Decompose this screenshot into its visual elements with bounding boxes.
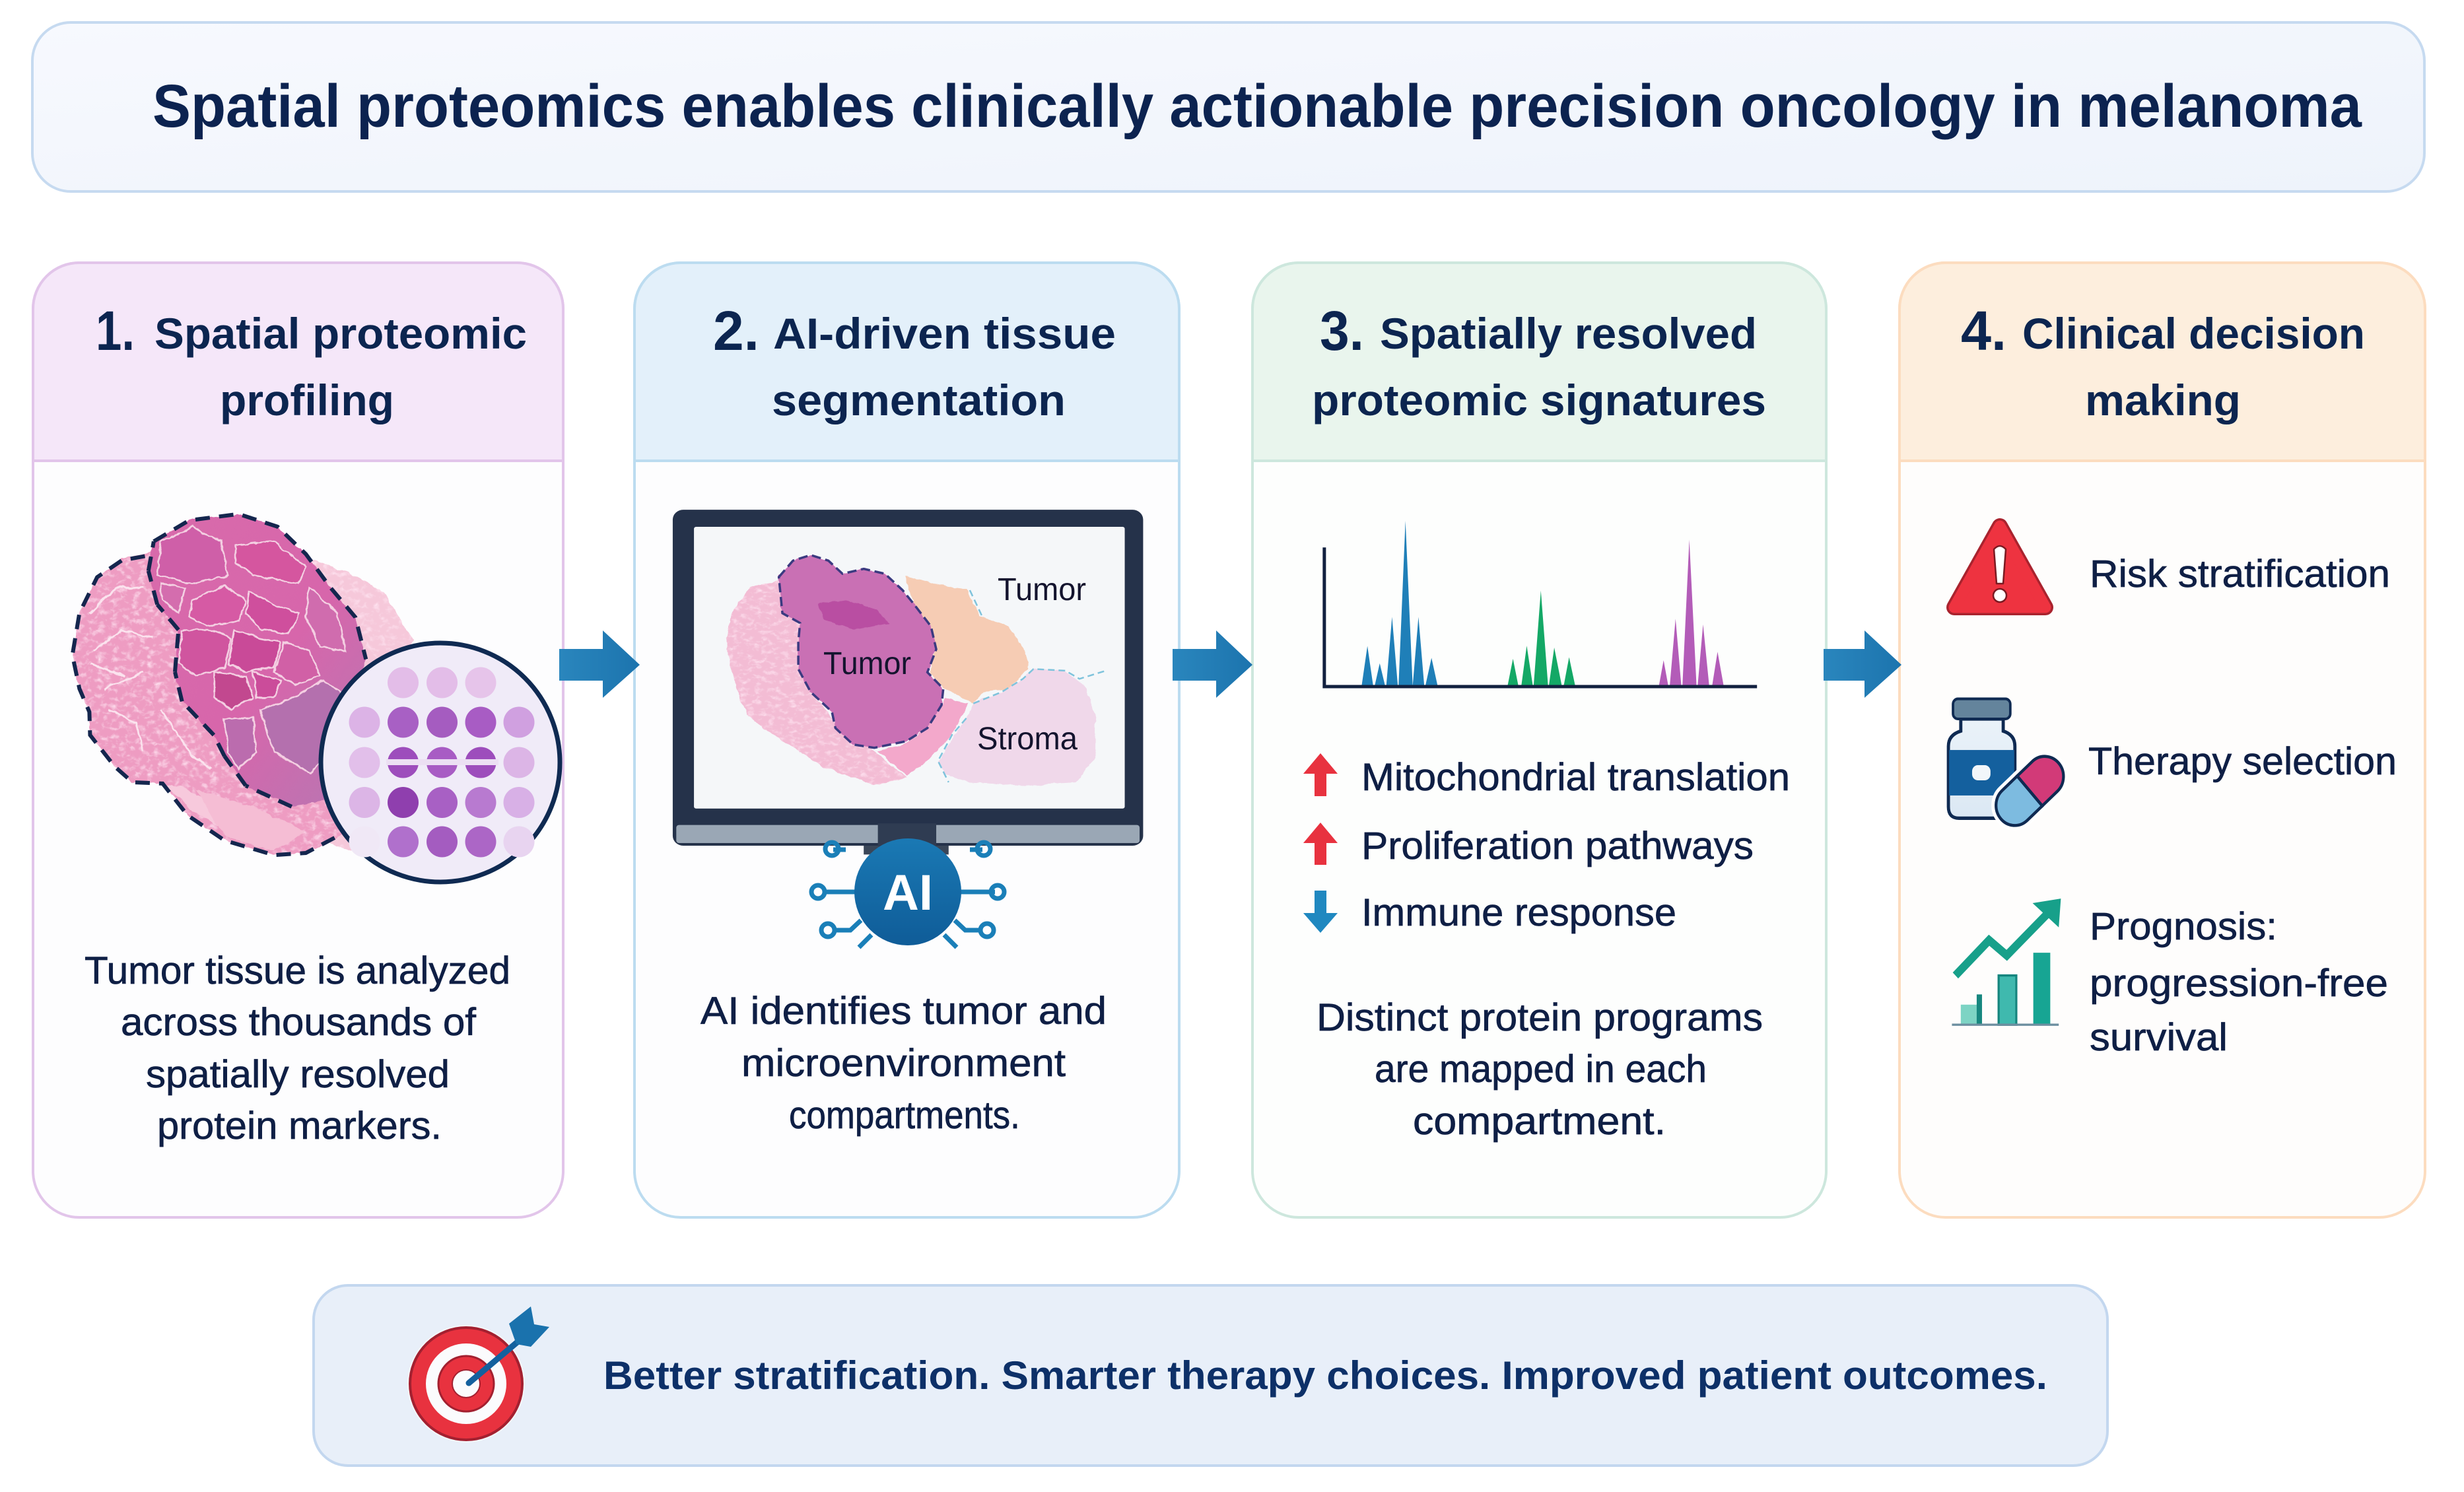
title banner <box>32 22 2424 191</box>
pathway change list: Mitochondrial translation <box>1361 756 1790 799</box>
panel 3 header <box>1252 263 1826 461</box>
panel 1 description: spatially resolved <box>146 1053 450 1096</box>
panel 2 description: AI identifies tumor and <box>701 990 1107 1033</box>
panel: 2. AI-driven tissue segmentation <box>634 263 1179 1217</box>
icon: red up arrow <box>1303 753 1338 796</box>
panel 1 description <box>85 949 510 1147</box>
segmentation labels <box>823 572 1086 757</box>
panel 3 header: proteomic signatures <box>1312 376 1766 424</box>
panel 2 header <box>634 263 1179 461</box>
panel 2 description <box>701 990 1107 1137</box>
panel 2 header: segmentation <box>772 376 1066 424</box>
panel 4 header: making <box>2085 376 2241 424</box>
panel 3 header: Spatially resolved <box>1380 309 1757 358</box>
panel 3 header: 3. <box>1320 300 1364 362</box>
chart: protein peak spectrum <box>1324 521 1757 687</box>
icon: warning triangle <box>1954 526 2045 607</box>
prognosis label: survival <box>2090 1016 2228 1059</box>
prognosis label <box>2090 905 2388 1059</box>
panel 2 header: AI-driven tissue <box>773 309 1116 358</box>
panel 4 header: 4. <box>1961 300 2006 362</box>
title: Spatial proteomics enables clinically actionable precision oncology in melanoma <box>153 73 2362 140</box>
panel 2 description: microenvironment <box>741 1042 1066 1085</box>
risk stratification label: Risk stratification <box>2090 553 2390 595</box>
panel 2 header: 2. <box>713 300 759 362</box>
takeaway text: Better stratification. Smarter therapy choices. Improved patient outcomes. <box>603 1353 2047 1398</box>
icon: blue down arrow <box>1303 891 1338 933</box>
panel: 1. spatial proteomic profiling <box>33 263 563 1217</box>
tissue section illustration <box>73 514 414 855</box>
icon: target with arrow <box>407 1306 549 1442</box>
arrow: panel 1 to 2 <box>559 630 640 698</box>
panel 1 description: Tumor tissue is analyzed <box>85 949 510 992</box>
panel 1 header <box>33 263 563 461</box>
panel 1 description: protein markers. <box>157 1104 442 1147</box>
magnifier with protein marker array <box>321 643 560 882</box>
panel: 4. clinical decision making <box>1899 263 2425 1217</box>
pathway change list: Proliferation pathways <box>1361 825 1754 867</box>
panel 1 description: across thousands of <box>121 1001 477 1044</box>
therapy selection label: Therapy selection <box>2088 740 2397 783</box>
segmentation labels: Tumor <box>998 572 1086 607</box>
icon: vial and capsule <box>1948 699 2071 834</box>
arrow: panel 2 to 3 <box>1173 630 1252 698</box>
segmentation labels: Stroma <box>977 722 1078 757</box>
panel 3 description: compartment. <box>1413 1100 1666 1143</box>
monitor with segmented tissue <box>673 510 1143 854</box>
panel: 3. spatially resolved proteomic signatures <box>1252 263 1826 1217</box>
panel 3 description: Distinct protein programs <box>1317 996 1763 1039</box>
panel 1 header: 1. <box>96 300 135 362</box>
segmentation labels: Tumor <box>823 646 911 681</box>
panel 4 header <box>1899 263 2425 461</box>
panel 2 description: compartments. <box>789 1094 1020 1137</box>
pathway change list: Immune response <box>1361 891 1676 934</box>
icon: red up arrow <box>1303 823 1338 865</box>
icon: AI chip <box>811 838 1004 947</box>
prognosis label: Prognosis: <box>2090 905 2277 948</box>
arrow: panel 3 to 4 <box>1824 630 1901 698</box>
panel 3 description <box>1317 996 1763 1143</box>
icon: growth chart <box>1952 899 2061 1025</box>
bottom takeaway banner <box>314 1285 2107 1466</box>
pathway change list <box>1303 753 1790 934</box>
panel 1 header: profiling <box>220 376 394 424</box>
icon: AI chip: AI <box>883 865 933 921</box>
panel 3 description: are mapped in each <box>1375 1048 1707 1091</box>
prognosis label: progression-free <box>2090 962 2388 1005</box>
panel 4 header: Clinical decision <box>2022 309 2365 358</box>
panel 1 header: Spatial proteomic <box>154 309 527 358</box>
